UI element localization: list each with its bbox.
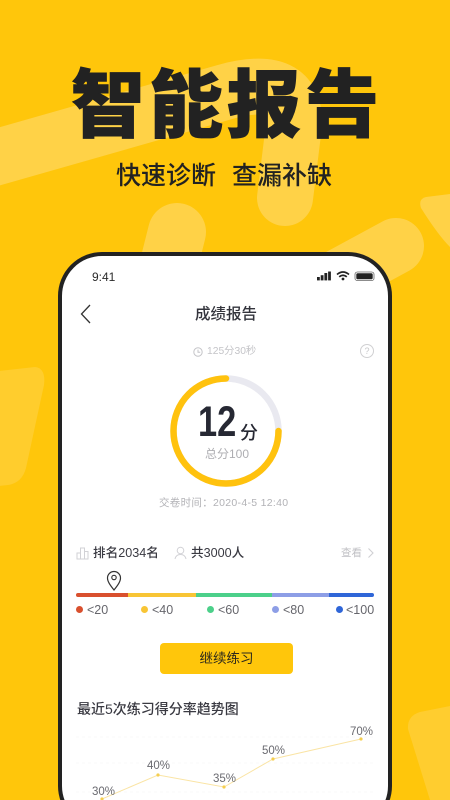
- status bar icons: [317, 271, 374, 281]
- panel: phone: [58, 252, 392, 800]
- legend item: under 80: <80: [283, 603, 304, 617]
- continue button: 继续练习: [200, 651, 254, 666]
- elapsed time: 125分30秒: [207, 346, 256, 357]
- help icon: ?: [364, 346, 370, 356]
- total score: 总分100: [205, 447, 249, 461]
- total people text: 共3000人: [191, 546, 244, 560]
- subtitle: 快速诊断 查漏补缺: [116, 156, 332, 192]
- title: 智能报告: [71, 46, 383, 153]
- icon: rank bars: [76, 548, 88, 560]
- line chart: 70%: [350, 726, 373, 738]
- rank text: 排名2034名: [93, 546, 159, 560]
- legend: [76, 603, 374, 617]
- legend item: under 80: [272, 603, 304, 617]
- submit time: 交卷时间：2020-4-5 12:40: [159, 497, 288, 509]
- icon: person: [174, 546, 186, 559]
- score ring: [170, 375, 282, 487]
- legend item: under 40: [141, 603, 173, 617]
- rank scale bar: [76, 593, 374, 597]
- help icon: [360, 344, 374, 358]
- icon: chevron: [368, 548, 374, 558]
- legend item: under 60: [207, 603, 239, 617]
- view link: 查看: [341, 547, 362, 559]
- status bar time: 9:41: [92, 270, 115, 284]
- rank row: [76, 546, 374, 560]
- line chart: 50%: [262, 745, 285, 757]
- legend item: under 20: <20: [87, 603, 108, 617]
- line chart: 35%: [213, 773, 236, 785]
- back arrow: [80, 304, 90, 324]
- continue button: [160, 643, 293, 674]
- chart heading: 最近5次练习得分率趋势图: [77, 701, 239, 717]
- line chart: [92, 726, 373, 800]
- legend item: under 60: <60: [218, 603, 239, 617]
- line chart: 40%: [147, 760, 170, 772]
- legend item: under 100: <100: [346, 603, 374, 617]
- score value: 12: [198, 398, 236, 446]
- icon: location pin: [106, 570, 122, 591]
- legend item: under 40: <40: [152, 603, 173, 617]
- legend item: under 20: [76, 603, 108, 617]
- score unit: 分: [240, 423, 258, 443]
- screen title: 成绩报告: [195, 306, 257, 323]
- line chart: 30%: [92, 786, 115, 798]
